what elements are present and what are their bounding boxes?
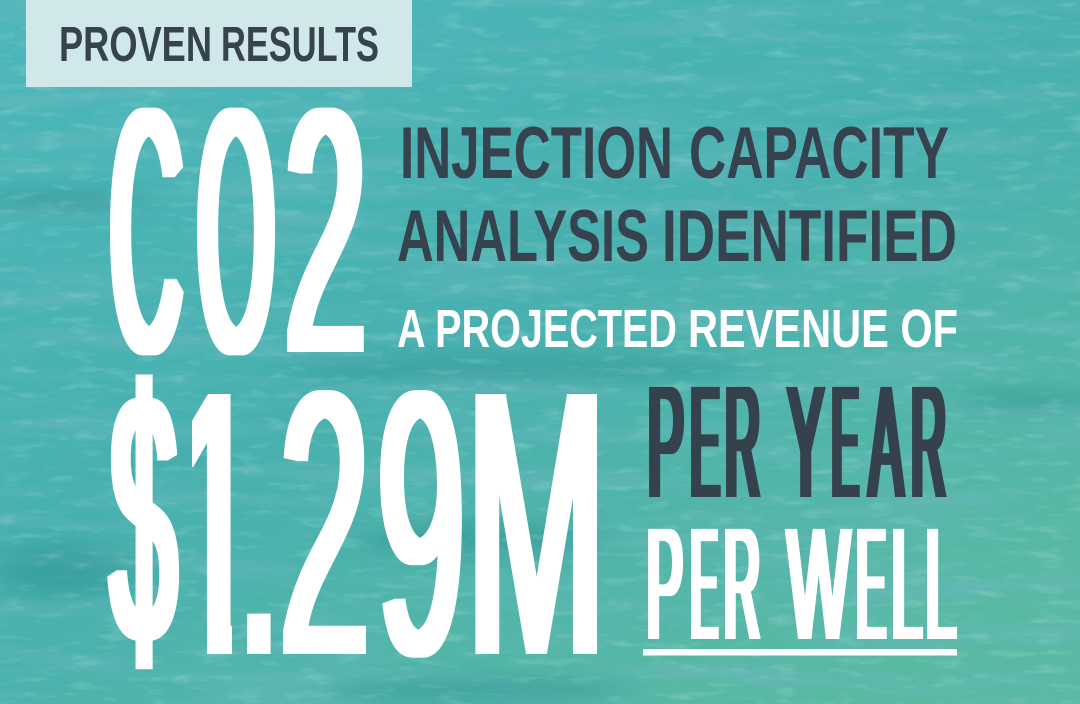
heading banner: PROVEN [59, 17, 212, 72]
text block: injection capacity [397, 113, 957, 277]
text: per year: Y [788, 352, 824, 531]
big number: revenue [107, 374, 597, 670]
big label: CO2: C [111, 36, 182, 427]
text: per well: W [787, 494, 850, 673]
text: per year: R [725, 352, 760, 531]
text: per year: E [690, 352, 720, 531]
text block: injection capacity: INJECTION [400, 113, 673, 194]
infographic: 2 [286, 36, 365, 427]
text: per year: A [869, 352, 903, 531]
text: per well: E [691, 494, 718, 673]
heading banner [26, 0, 412, 87]
text block: projected revenue: A PROJECTED [397, 299, 677, 359]
text block: projected revenue: REVENUE OF [688, 299, 958, 359]
text block: injection capacity: IDENTIFIED [662, 196, 957, 277]
text: per well: E [856, 494, 886, 673]
text: per well: R [724, 494, 760, 673]
text block: injection capacity: CAPACITY [689, 113, 949, 194]
text block: injection capacity: ANALYSIS [397, 196, 649, 277]
underline [643, 649, 957, 656]
text: per year: E [832, 352, 858, 531]
infographic: R [911, 352, 946, 531]
text: per well: L [892, 494, 922, 673]
big label: CO2: O [198, 36, 274, 427]
text: per well: P [647, 494, 683, 673]
infographic: L [926, 494, 956, 673]
heading banner: RESULTS [221, 17, 379, 72]
text: per year: P [648, 352, 684, 531]
